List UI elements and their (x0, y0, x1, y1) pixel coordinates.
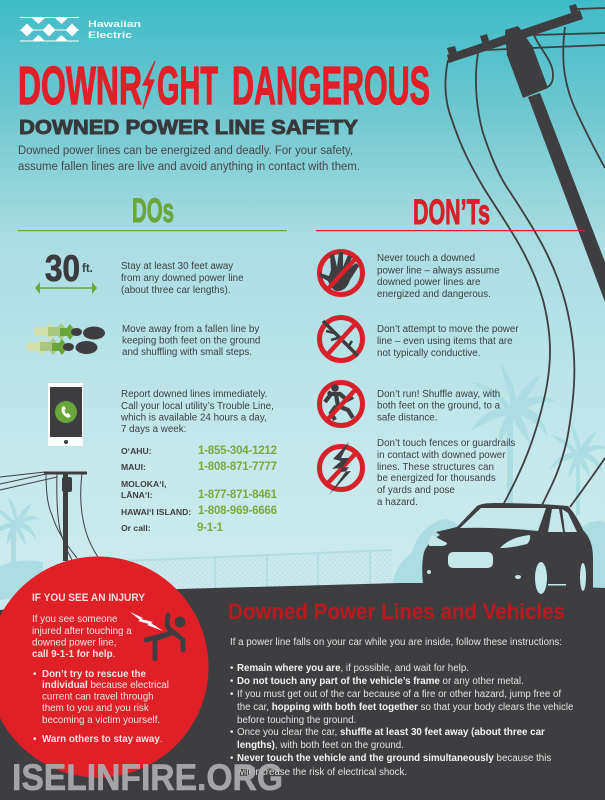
table: phone numbers: HAWAI‘I ISLAND: (121, 507, 191, 517)
text: never touch: Never touch a downed (377, 253, 475, 264)
text: vehicle instructions: • (230, 689, 234, 700)
watermark: ISELINFIRE.ORG: ISELINFIRE.ORG (12, 757, 283, 798)
text: injury body: becoming a victim yourself. (42, 715, 160, 726)
text: vehicle instructions: lengths), with both feet on the ground. (237, 740, 404, 751)
table: phone numbers: 9-1-1 (197, 522, 224, 534)
icon: small utility pole with wires (0, 472, 98, 561)
text: don't run (377, 389, 501, 424)
dark lower panel background (0, 583, 605, 800)
text: don't touch fences: be energized for thousands (377, 473, 496, 484)
text: vehicle instructions: the car, hopping with both feet together so that your body clears the vehicle (237, 702, 573, 713)
text: never touch: downed power lines are (377, 277, 481, 288)
text: injury body: downed power line, (32, 638, 116, 648)
text: injury body (32, 614, 169, 745)
text: stay 30 feet away: from any downed power line (121, 273, 244, 284)
text: don't touch fences: in contact with downed power (377, 450, 506, 461)
text: move away: and shuffling with small steps. (122, 347, 252, 358)
chain link fence (100, 550, 392, 592)
icon: tall utility pole with wires (445, 4, 605, 507)
text: move away: keeping both feet on the ground (122, 336, 260, 346)
text: vehicle instructions: Once you clear the car, shuffle at least 30 feet away (about three car (237, 727, 545, 738)
text: vehicle instructions: • (230, 753, 234, 764)
text: don't touch fences: lines. These structures can (377, 462, 494, 473)
table: phone numbers: 1-877-871-8461 (198, 489, 278, 501)
text: don't attempt (377, 324, 519, 359)
icon: 30 ft arrow (35, 248, 97, 294)
text: don't attempt: line – even using items that are (377, 336, 513, 347)
table: phone numbers: MAUI: (121, 462, 146, 472)
text: vehicle instructions: • (230, 676, 234, 687)
icon: car silhouette (422, 503, 593, 594)
text: report downed lines: which is available 24 hours a day, (120, 412, 267, 424)
text: vehicle instructions: before touching the ground. (237, 715, 356, 726)
text: vehicle instructions: Never touch the vehicle and the ground simultaneously because this (237, 753, 551, 764)
table: phone numbers: 1-855-304-1212 (198, 445, 277, 457)
logo: Hawaiian Electric: Electric (88, 30, 132, 40)
text: don't run: safe distance. (377, 412, 437, 424)
text: injury body: individual because electrical (42, 680, 169, 691)
table: phone numbers: Or call: (121, 523, 151, 533)
text: injury body: • (33, 734, 37, 745)
icon: no moving line with stick (320, 318, 362, 360)
text: move away (122, 324, 260, 358)
text: vehicle instructions: • (230, 663, 234, 674)
text: don't touch fences (377, 438, 515, 508)
icon: 30 ft arrow: 30 (45, 248, 80, 289)
intro text (18, 145, 360, 173)
text: never touch (377, 253, 500, 300)
icon: no touching hand (319, 252, 362, 294)
table: phone numbers: 1-808-871-7777 (198, 461, 277, 473)
icon: no running (320, 382, 362, 426)
text: don't attempt: not typically conductive. (377, 348, 480, 359)
text: vehicle instructions: If a power line falls on your car while you are inside, follow these instructions: (230, 637, 562, 648)
text: vehicle instructions: Do not touch any part of the vehicle’s frame or any other metal. (237, 676, 524, 687)
text: don't run: Don’t run! Shuffle away, with (377, 389, 500, 400)
text: don't touch fences: Don’t touch fences or guardrails (377, 438, 515, 449)
text: injury body: current can travel through (42, 692, 154, 702)
table: phone numbers: 1-808-969-6666 (198, 505, 277, 517)
title: Downright Dangerous: GHT (157, 56, 218, 116)
title: Downright Dangerous (18, 56, 430, 116)
text: injury body: Warn others to stay away. (42, 734, 163, 745)
text: vehicle instructions: Remain where you are, if possible, and wait for help. (237, 663, 469, 674)
table: phone numbers: LĀNA‘I: (121, 490, 153, 500)
text: injury body: If you see someone (32, 614, 118, 625)
text: injury body: • (33, 669, 37, 680)
text: don't touch fences: of yards and pose (377, 485, 455, 496)
text: vehicle instructions: will increase the risk of electrical shock. (236, 767, 407, 778)
panel: downed power lines and vehicles (228, 599, 573, 778)
text: report downed lines: 7 days a week: (121, 424, 186, 435)
text: report downed lines: Call your local utility’s Trouble Line, (121, 401, 274, 412)
heading: injury: IF YOU SEE AN INJURY (32, 592, 146, 604)
heading: DOs: DOs (132, 192, 174, 230)
text: stay 30 feet away: Stay at least 30 feet away (121, 261, 233, 272)
text: don't run: both feet on the ground, to a (377, 400, 501, 412)
text: stay 30 feet away (121, 261, 244, 296)
intro text: Downed power lines can be energized and deadly. For your safety, (18, 145, 353, 157)
logo: Hawaiian Electric (20, 18, 141, 41)
title: Downright Dangerous: DOWNR (18, 56, 142, 116)
intro text: assume fallen lines are live and avoid anything in contact with them. (18, 161, 360, 173)
text: never touch: energized and dangerous. (377, 289, 491, 300)
heading: DON'Ts: DON’Ts (413, 193, 490, 232)
table: phone numbers: O‘AHU: (121, 446, 152, 456)
icon: falling person shocked (130, 612, 186, 659)
icon: 30 ft arrow: ft. (82, 263, 93, 275)
text: never touch: power line – always assume (377, 266, 500, 276)
text: don't attempt: Don’t attempt to move the power (377, 324, 519, 335)
table: phone numbers (121, 445, 278, 534)
text: injury body: them to you and you risk (42, 703, 149, 714)
text: move away: Move away from a fallen line by (122, 324, 259, 335)
heading: vehicles: Downed Power Lines and Vehicles (228, 599, 565, 624)
palm trees and foliage (0, 364, 605, 600)
text: vehicle instructions (230, 637, 573, 778)
text: injury body: Don’t try to rescue the (42, 669, 147, 680)
subtitle: DOWNED POWER LINE SAFETY (19, 116, 358, 139)
table: phone numbers: MOLOKA‘I, (121, 479, 166, 489)
panel: if you see an injury (0, 556, 208, 778)
logo: Hawaiian Electric: Hawaiian (88, 19, 141, 29)
text: don't touch fences: a hazard. (377, 497, 418, 508)
title: Downright Dangerous: DANGEROUS (232, 56, 430, 116)
icon: no lightning (320, 442, 362, 495)
text: report downed lines (120, 389, 274, 435)
text: injury body: injured after touching a (32, 626, 132, 637)
text: vehicle instructions: • (230, 727, 234, 738)
text: stay 30 feet away: (about three car lengths). (121, 285, 230, 296)
icon: smartphone (48, 383, 83, 446)
text: injury body: call 9-1-1 for help. (32, 649, 115, 660)
text: report downed lines: Report downed lines immediately. (121, 389, 267, 400)
icon: shuffling feet (27, 323, 105, 355)
text: vehicle instructions: If you must get out of the car because of a fire or other hazard, jump free of (237, 689, 561, 700)
